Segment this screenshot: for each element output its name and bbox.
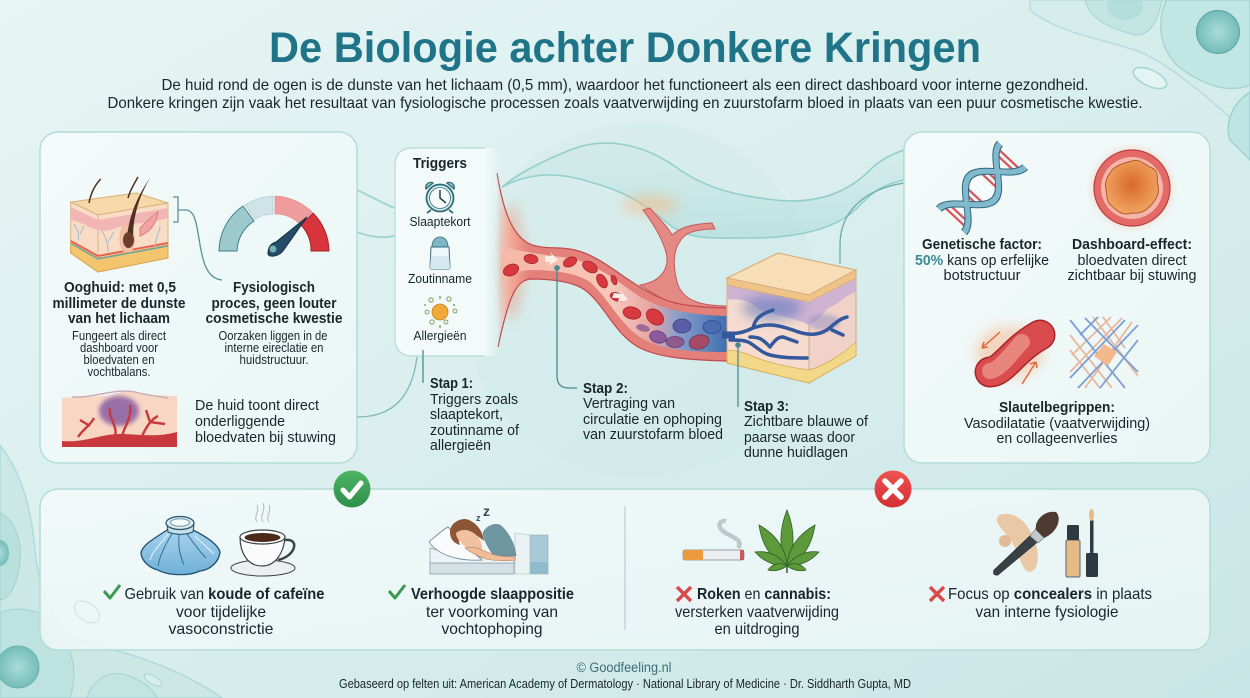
text: dashboard effect: [1068, 236, 1196, 284]
text: step 1: slaaptekort,: [430, 406, 503, 423]
text: step 1: Triggers zoals: [430, 391, 518, 408]
text: genetic factor: Genetische factor:: [922, 236, 1042, 253]
text: step 1: allergieën: [430, 437, 491, 454]
item: concealers: van interne fysiologie: [976, 604, 1119, 621]
text: step 2: circulatie en ophoping: [583, 411, 722, 428]
item: cold or caffeine: voor tijdelijke: [176, 604, 266, 621]
icon: skin with visible vessels: [62, 391, 177, 447]
text: physiological process: Fysiologisch: [233, 279, 315, 296]
icon: artery cross-section: [1086, 142, 1178, 234]
cross mark: [930, 587, 944, 601]
check mark: [389, 585, 405, 598]
text: step 3: Zichtbare blauwe of: [744, 413, 869, 430]
heading: triggers: Triggers: [413, 155, 467, 172]
icon: salt shaker: [430, 237, 450, 269]
cells bottom left: [0, 445, 222, 698]
item: elevated sleeping: ter voorkoming van: [426, 604, 558, 621]
text: genetic factor: 50% kans op erfelijke: [915, 252, 1049, 269]
text: step 3: [744, 398, 869, 461]
vessel lumen: [501, 247, 727, 352]
skin cube: [722, 253, 856, 383]
icon: sleeping person: [429, 503, 548, 574]
item: concealers: Focus op concealers in plaats: [948, 586, 1152, 603]
sleep letters: z: [476, 513, 481, 523]
text: eye skin: dashboard voor: [80, 341, 158, 355]
text: genetic factor: botstructuur: [944, 267, 1020, 284]
text: step 2: Stap 2:: [583, 380, 628, 397]
icon: dilated vessel: [976, 326, 1044, 384]
cells top right: [1030, 0, 1250, 160]
text: eye skin: van het lichaam: [68, 310, 170, 327]
text: physiological process: proces, geen louter: [212, 295, 337, 312]
text: step 2: Vertraging van: [583, 395, 675, 412]
text: eye skin: [52, 279, 186, 379]
icon: allergen: [424, 296, 457, 328]
text: step 1: [430, 375, 520, 454]
item: elevated sleeping: Verhoogde slaappositie: [411, 586, 574, 603]
text: skin shows vessels: De huid toont direct: [195, 397, 320, 414]
text: physiological process: Oorzaken liggen in de: [218, 329, 328, 343]
connector: cube to right panel: [840, 183, 904, 264]
icon: alarm clock: [426, 182, 454, 213]
footer: Gebaseerd op felten uit: American Academy of Dermatology · National Library of Medicine · Dr. Siddharth Gupta, MD: [339, 677, 911, 691]
text: eye skin: millimeter de dunste: [52, 295, 186, 312]
subtitle: [108, 77, 1142, 112]
text: eye skin: Fungeert als direct: [72, 329, 166, 343]
vessel body: [497, 173, 727, 361]
text: skin shows vessels: onderliggende: [195, 413, 285, 430]
triggers panel: [395, 148, 500, 356]
text: physiological process: cosmetische kwestie: [206, 310, 342, 327]
badge: avoid: [874, 470, 912, 508]
text: key concepts: [964, 399, 1150, 447]
red blood cells: [501, 253, 721, 351]
icon: coffee cup: [231, 503, 295, 576]
left panel: [40, 132, 357, 463]
sleep letters: z: [483, 503, 490, 519]
label: slaaptekort: Slaaptekort: [410, 215, 471, 229]
flow arrows: [545, 252, 628, 302]
check mark: [104, 585, 120, 598]
footer: [339, 660, 911, 691]
label: zoutinname: Zoutinname: [408, 272, 472, 286]
item: smoking and cannabis: [675, 586, 839, 638]
text: key concepts: Vasodilatatie (vaatverwijding): [964, 415, 1150, 432]
text: key concepts: en collageenverlies: [996, 430, 1118, 447]
icon: gauge: [219, 196, 329, 256]
text: dashboard effect: bloedvaten direct: [1078, 252, 1187, 269]
text: eye skin: Ooghuid: met 0,5: [64, 279, 176, 296]
cross mark: [677, 587, 691, 601]
connector left panel to triggers: [357, 357, 417, 417]
blue veins: [724, 310, 847, 335]
icon: cannabis leaf: [755, 510, 819, 573]
right panel: [904, 132, 1210, 463]
footer: © Goodfeeling.nl: [576, 660, 672, 675]
text: step 1: zoutinname of: [430, 422, 520, 439]
item: cold or caffeine: Gebruik van koude of cafeïne: [124, 586, 325, 603]
blood vessel illustration: [497, 173, 727, 361]
text: step 3: paarse waas door: [744, 429, 855, 446]
item: elevated sleeping: vochtophoping: [442, 621, 542, 638]
item: smoking and cannabis: Roken en cannabis:: [697, 586, 831, 603]
text: step 1: Stap 1:: [430, 375, 473, 392]
item: concealers: [930, 586, 1152, 621]
icon: makeup brush and concealer: [994, 509, 1098, 577]
vessel branch: [640, 208, 727, 310]
icon: collagen mesh: [1070, 317, 1138, 388]
sleep letters: [476, 503, 490, 523]
subtitle: De huid rond de ogen is de dunste van het lichaam (0,5 mm), waardoor het functioneert als een direct dashboard voor interne gezondheid.: [162, 77, 1088, 94]
text: step 2: van zuurstofarm bloed: [583, 426, 723, 443]
text: physiological process: interne eireclatie en: [224, 341, 324, 355]
text: eye skin: vochtbalans.: [88, 365, 150, 379]
text: key concepts: Slautelbegrippen:: [999, 399, 1115, 416]
text: physiological process: [206, 279, 342, 367]
badge: do: [334, 470, 370, 508]
item: elevated sleeping: [389, 585, 574, 638]
icon: skin cross-section: [71, 177, 168, 272]
item: smoking and cannabis: versterken vaatverwijding: [675, 604, 839, 621]
icon: ice bag: [141, 516, 220, 575]
text: step 3: dunne huidlagen: [744, 444, 848, 461]
title: De Biologie achter Donkere Kringen: [269, 24, 981, 72]
text: eye skin: bloedvaten en: [84, 353, 155, 367]
text: genetic factor: [915, 236, 1049, 284]
item: cold or caffeine: vasoconstrictie: [168, 621, 274, 638]
label: allergieen: Allergieën: [414, 329, 467, 343]
text: dashboard effect: zichtbaar bij stuwing: [1068, 267, 1196, 284]
text: dashboard effect: Dashboard-effect:: [1072, 236, 1192, 253]
flowing membrane waves: [357, 143, 904, 238]
bottom panel: [40, 470, 1210, 650]
vessel wall lines: [497, 173, 727, 361]
text: step 2: [583, 380, 723, 443]
icon: DNA helix: [939, 144, 1025, 232]
step leaders: [423, 266, 740, 407]
icon: cigarette: [683, 521, 744, 560]
item: cold or caffeine: [104, 585, 325, 638]
subtitle: Donkere kringen zijn vaak het resultaat van fysiologische processen zoals vaatverwijding en zuurstofarm bloed in plaats van een puur cosmetische kwestie.: [108, 95, 1142, 112]
item: smoking and cannabis: en uitdroging: [714, 621, 800, 638]
text: physiological process: huidstructuur.: [240, 353, 308, 367]
text: skin shows vessels: bloedvaten bij stuwing: [195, 429, 336, 446]
bracket connector: [173, 197, 222, 280]
text: skin shows vessels: [195, 397, 336, 446]
text: step 3: Stap 3:: [744, 398, 789, 415]
